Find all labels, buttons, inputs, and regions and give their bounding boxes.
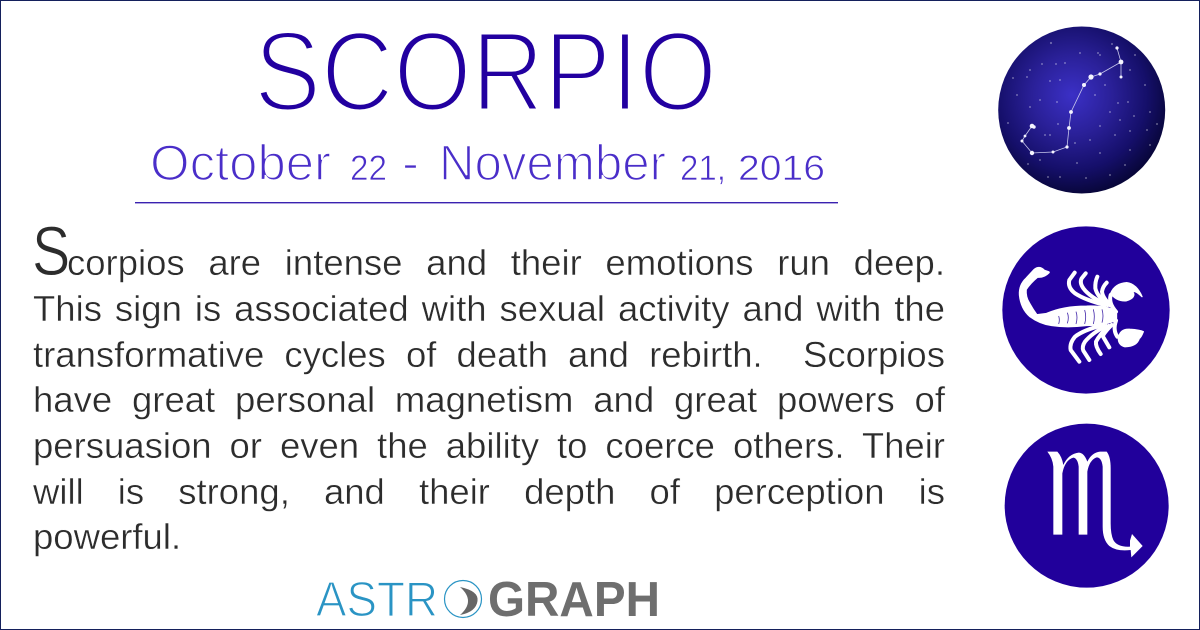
drop cap S: S bbox=[32, 212, 70, 290]
line 1: corpios are intense and their emotions run deep. bbox=[67, 242, 945, 283]
logo: Astrograph: GRAPH bbox=[488, 573, 660, 627]
line 6: will is strong, and their depth of perception is bbox=[33, 471, 945, 512]
line 3: transformative cycles of death and rebirth. Scorpios bbox=[33, 334, 945, 375]
date range: October bbox=[150, 135, 331, 191]
date range: 22 bbox=[350, 149, 387, 188]
date range: 21, bbox=[680, 149, 726, 188]
date range bbox=[150, 135, 825, 191]
line 2: This sign is associated with sexual activity and with the bbox=[33, 288, 945, 329]
date range: November bbox=[439, 135, 666, 191]
body text bbox=[32, 212, 946, 557]
line 7: powerful. bbox=[33, 516, 181, 557]
glyph figure bbox=[1047, 452, 1143, 557]
icon: scorpion bbox=[1002, 226, 1170, 394]
line 4: have great personal magnetism and great powers of bbox=[33, 379, 945, 420]
logo: Astrograph bbox=[316, 573, 660, 627]
date range: - bbox=[402, 135, 419, 191]
line 5: persuasion or even the ability to coerce others. Their bbox=[33, 425, 945, 466]
icon: constellation bbox=[998, 26, 1166, 194]
icon: scorpio glyph bbox=[1004, 424, 1169, 588]
logo: Astrograph: ASTR bbox=[316, 573, 438, 627]
date range: 2016 bbox=[738, 149, 825, 188]
scorpion figure bbox=[1020, 268, 1143, 362]
